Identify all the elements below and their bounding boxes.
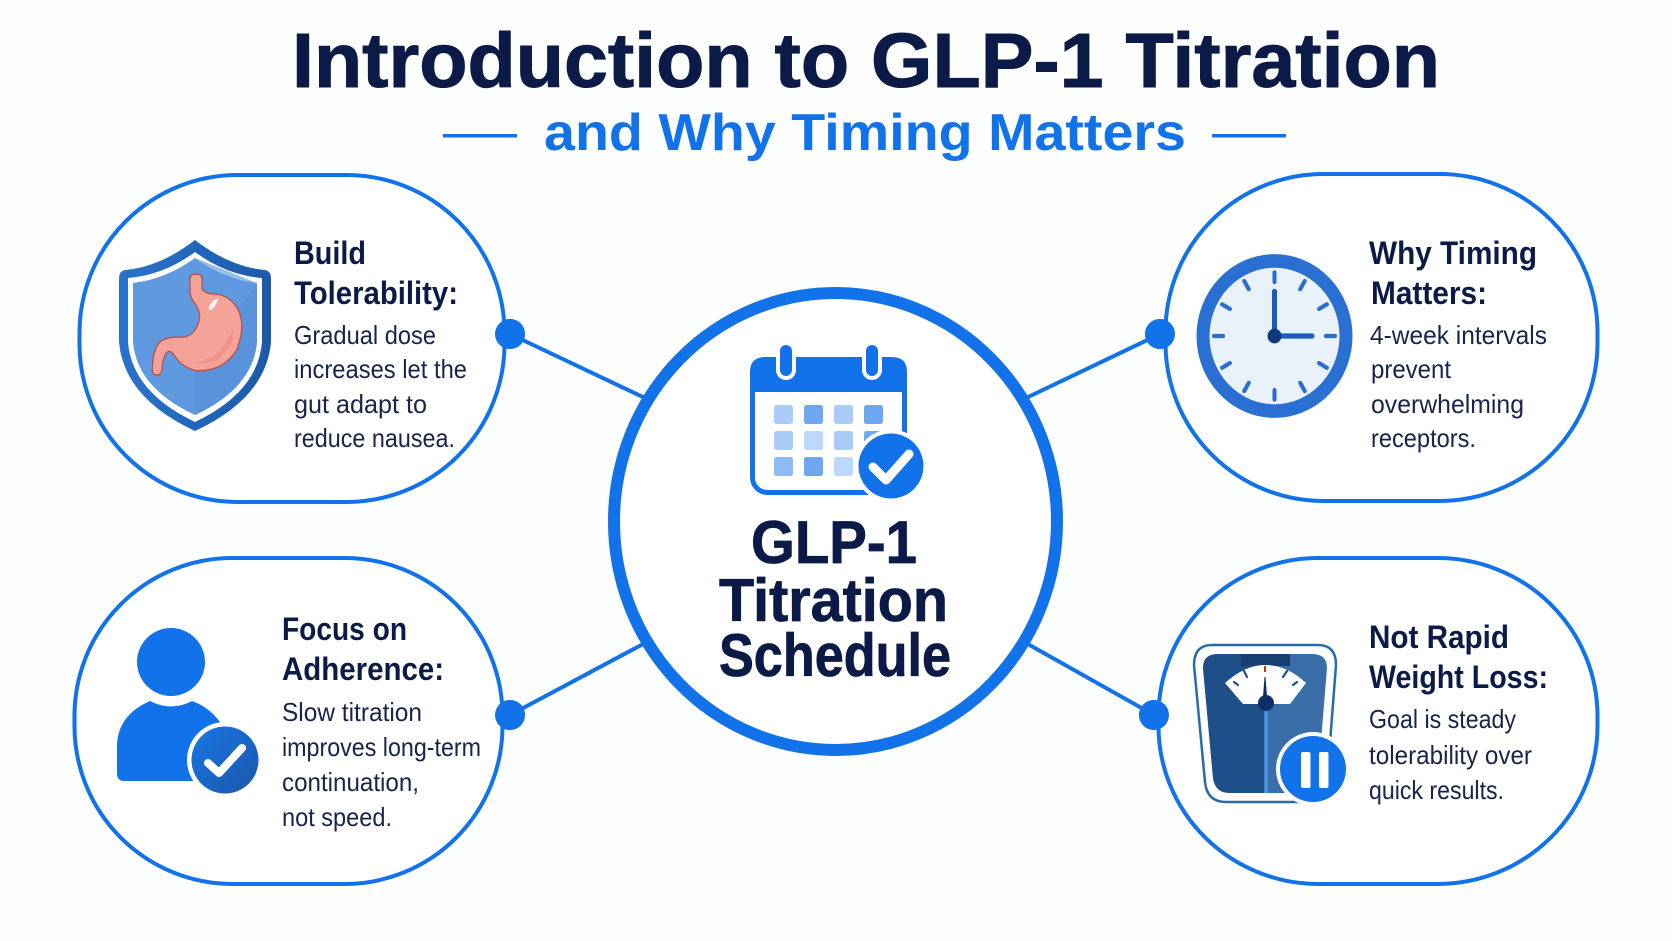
text: build tolerability: Tolerability: <box>294 275 458 311</box>
text: center label: GLP-1 <box>751 509 917 576</box>
connector: bottom right <box>1026 643 1169 730</box>
text: not rapid weight loss: quick results. <box>1369 775 1504 805</box>
text: focus on adherence: Adherence: <box>282 651 444 687</box>
text: why timing matters: Why Timing <box>1369 235 1537 271</box>
text: why timing matters: prevent <box>1371 354 1452 384</box>
connector: top left <box>495 319 645 398</box>
text: why timing matters <box>1369 235 1547 453</box>
text: build tolerability <box>294 235 467 453</box>
icon: person with check badge <box>117 628 263 798</box>
icon: shield with stomach <box>119 240 271 431</box>
text: not rapid weight loss: tolerability over <box>1369 740 1532 770</box>
panel: not rapid weight loss <box>1139 558 1598 884</box>
text: focus on adherence: Focus on <box>282 611 407 647</box>
text: focus on adherence <box>282 611 481 832</box>
text: why timing matters: Matters: <box>1371 275 1487 311</box>
text: center label: Titration <box>719 567 948 634</box>
text: focus on adherence: improves long-term <box>282 732 481 762</box>
text: build tolerability: gut adapt to <box>294 389 427 419</box>
text: build tolerability: reduce nausea. <box>294 423 455 453</box>
text: not rapid weight loss: Goal is steady <box>1369 704 1516 734</box>
panel: focus on adherence <box>74 558 525 884</box>
connector: bottom left <box>495 643 645 730</box>
panel: center hub <box>614 293 1057 750</box>
subtitle: and Why Timing Matters <box>544 104 1186 162</box>
text: build tolerability: increases let the <box>294 354 467 384</box>
text: focus on adherence: continuation, <box>282 767 419 797</box>
text: why timing matters: receptors. <box>1371 423 1476 453</box>
text: build tolerability: Build <box>294 235 366 271</box>
panel: why timing matters <box>1145 174 1598 501</box>
connector: top right <box>1026 319 1175 398</box>
text: center label <box>719 509 951 689</box>
text: not rapid weight loss: Not Rapid <box>1369 619 1509 655</box>
text: why timing matters: overwhelming <box>1371 389 1524 419</box>
panel: build tolerability <box>80 175 525 502</box>
title: Introduction to GLP-1 Titration <box>292 18 1440 104</box>
text: focus on adherence: not speed. <box>282 802 392 832</box>
icon: bathroom scale with pause badge <box>1194 645 1350 806</box>
text: center label: Schedule <box>719 622 951 689</box>
text: not rapid weight loss <box>1369 619 1548 805</box>
icon: clock <box>1203 261 1346 411</box>
text: build tolerability: Gradual dose <box>294 320 436 350</box>
icon: calendar with check <box>750 342 928 502</box>
text: why timing matters: 4-week intervals <box>1370 320 1547 350</box>
text: focus on adherence: Slow titration <box>282 697 422 727</box>
text: not rapid weight loss: Weight Loss: <box>1369 659 1548 695</box>
